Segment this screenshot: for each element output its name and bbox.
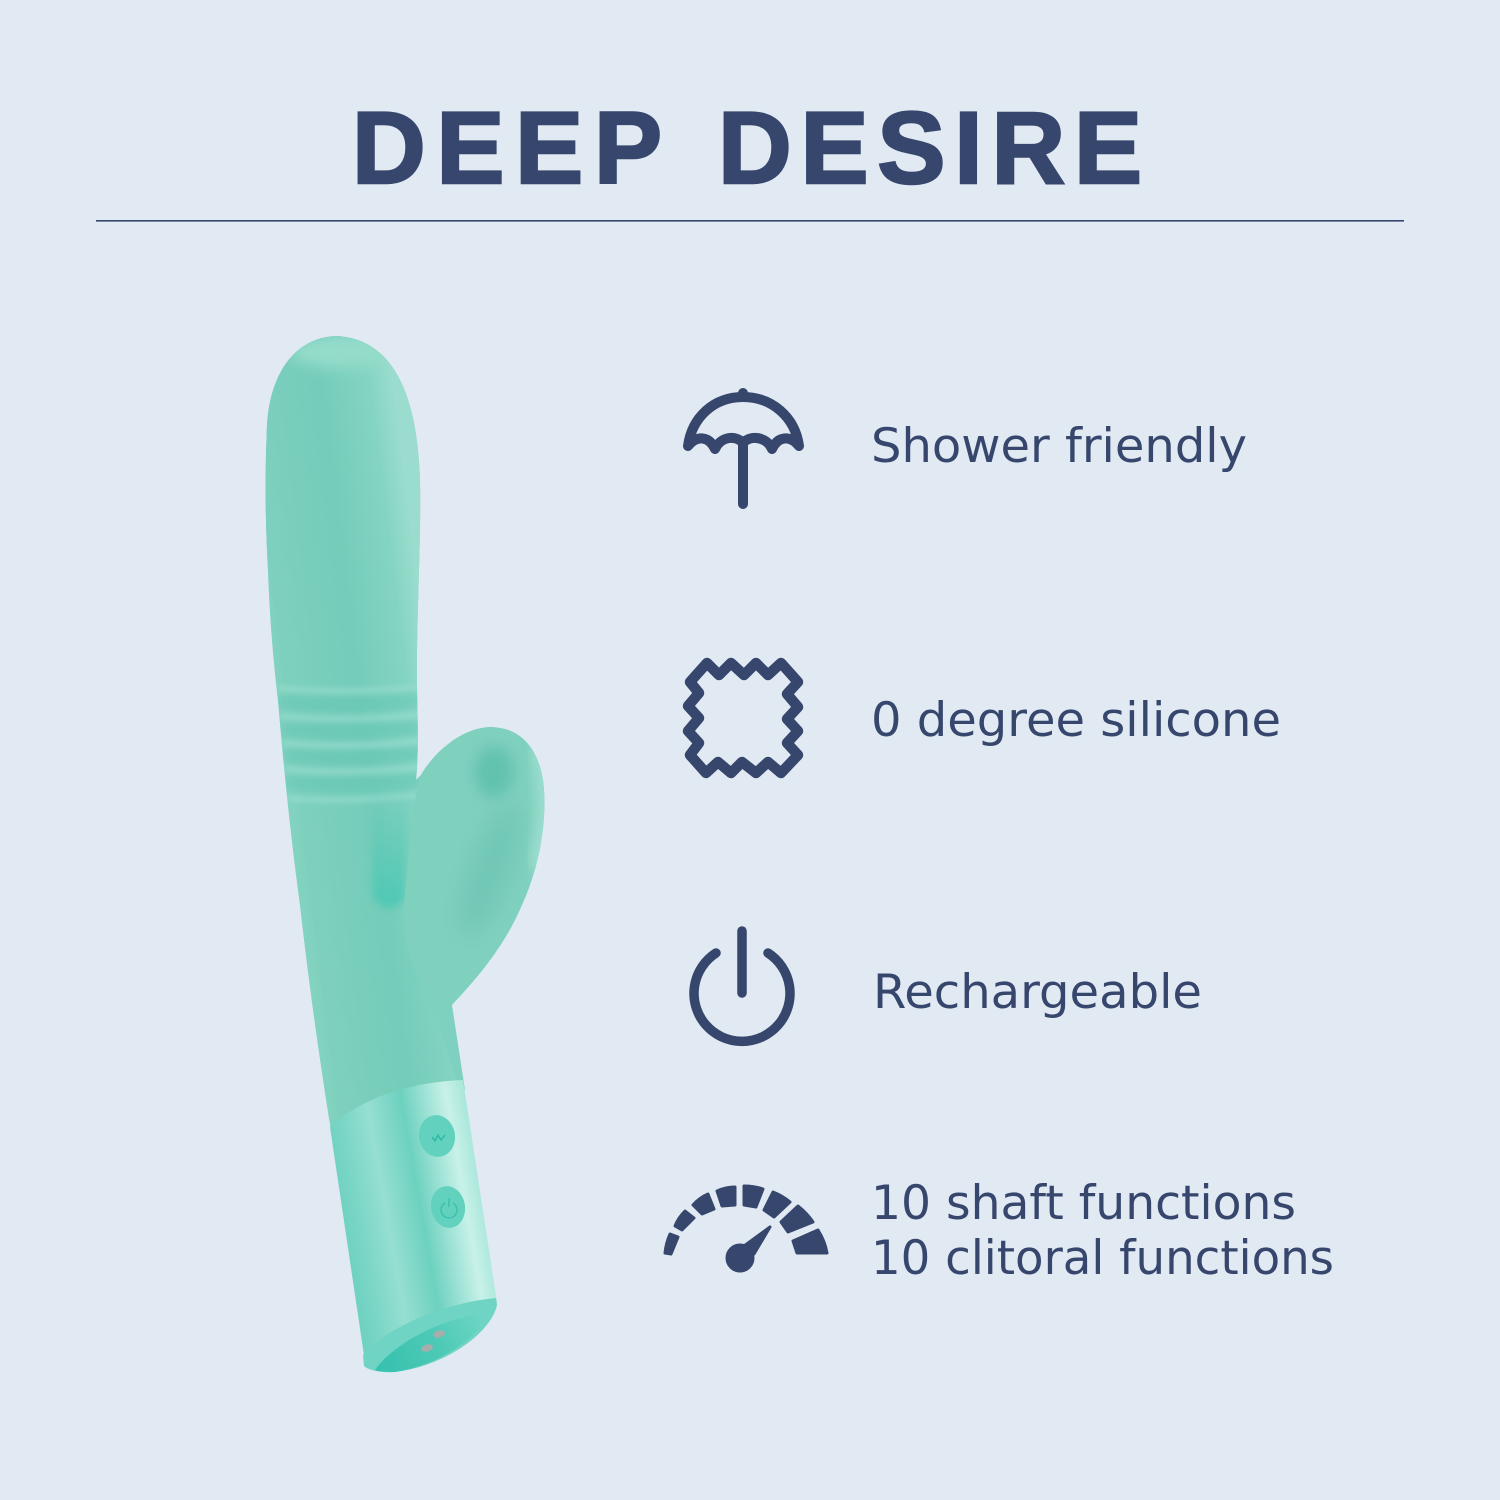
ring ridges (277, 687, 421, 800)
label: functions: 10 clitoral functions (871, 1231, 1334, 1286)
feature: shower friendly (688, 393, 1247, 504)
product base cap (363, 1298, 497, 1372)
charging contacts (420, 1329, 446, 1353)
product metal handle (330, 1080, 497, 1362)
icon: power (694, 931, 790, 1041)
title (352, 91, 1142, 205)
label: functions: 10 shaft functions (871, 1176, 1296, 1231)
icon: umbrella (688, 393, 799, 504)
control button: wave (416, 1112, 458, 1160)
label: rechargeable: Rechargeable (873, 965, 1202, 1020)
label: functions (871, 1176, 1334, 1286)
label: silicone: 0 degree silicone (871, 693, 1281, 748)
feature: silicone (688, 663, 1281, 773)
title: DESIRE (718, 91, 1142, 205)
control button: power (428, 1183, 468, 1231)
feature: rechargeable (694, 931, 1202, 1041)
label: shower friendly: Shower friendly (871, 419, 1247, 474)
product silicone body (266, 336, 544, 1126)
icon: speed gauge (665, 1186, 827, 1271)
feature: functions (665, 1176, 1334, 1286)
title: DEEP (352, 91, 662, 205)
infographic canvas (96, 110, 1404, 1372)
product illustration (266, 336, 544, 1372)
icon: zigzag swatch (688, 663, 798, 773)
